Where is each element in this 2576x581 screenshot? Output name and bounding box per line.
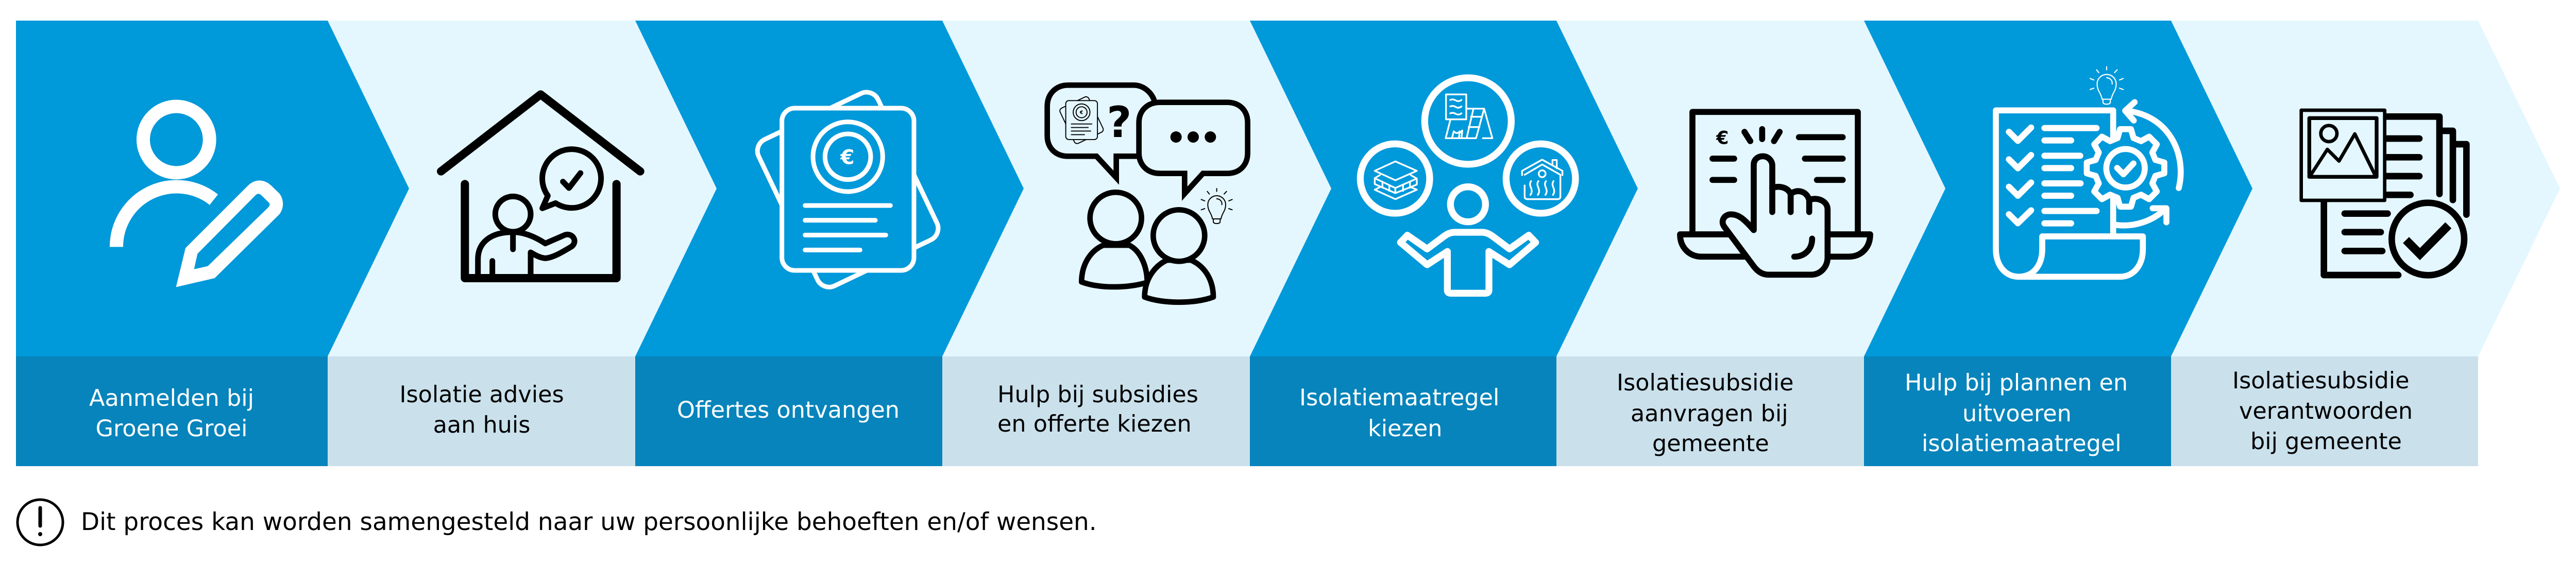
label: step 7: uitvoeren bbox=[1962, 401, 2072, 427]
note text: Dit proces kan worden samengesteld naar uw persoonlijke behoeften en/of wensen. bbox=[81, 508, 1097, 536]
label: step 1: Groene Groei bbox=[96, 416, 247, 442]
label: step 5: Isolatiemaatregel bbox=[1299, 385, 1499, 411]
icon: adviser in house bbox=[441, 94, 640, 278]
label: step 7: isolatiemaatregel bbox=[1922, 431, 2122, 457]
label: step 8 bbox=[2171, 356, 2478, 466]
label: step 7: Hulp bij plannen en bbox=[1905, 370, 2128, 396]
icon: two people talking: € bbox=[1079, 110, 1083, 115]
chevron: step 5 bbox=[1250, 21, 1639, 356]
chevron: step 2 bbox=[328, 21, 718, 356]
chevron: step 8 bbox=[2171, 21, 2560, 356]
chevron: step 1 bbox=[16, 21, 410, 356]
panel: step 3 offertes bbox=[635, 21, 1025, 466]
icon: two people talking: ? bbox=[1107, 97, 1132, 147]
label: step 7 bbox=[1864, 356, 2171, 466]
label: step 8: bij gemeente bbox=[2250, 429, 2402, 455]
icon: hand clicking on laptop: € bbox=[1716, 128, 1729, 148]
panel: step 7 plannen bbox=[1864, 21, 2253, 466]
icon: quotation documents bbox=[753, 88, 942, 292]
icon: quotation documents: € bbox=[840, 145, 855, 169]
label: step 3: Offertes ontvangen bbox=[677, 397, 900, 423]
label: step 1: Aanmelden bij bbox=[89, 385, 254, 412]
icon: person with pencil bbox=[116, 107, 283, 287]
label: step 2: Isolatie advies bbox=[399, 382, 564, 408]
label: step 6: aanvragen bij bbox=[1631, 401, 1788, 427]
panel: step 6 aanvragen bbox=[1556, 21, 1946, 466]
chevron: step 3 bbox=[635, 21, 1025, 356]
label: step 6 bbox=[1556, 356, 1864, 466]
panel: step 2 advies bbox=[328, 21, 718, 466]
icon: exclamation mark in circle bbox=[18, 500, 63, 545]
label: step 5: kiezen bbox=[1368, 416, 1442, 442]
label: step 4 bbox=[942, 356, 1250, 466]
label: step 6: gemeente bbox=[1652, 431, 1769, 457]
label: step 8: verantwoorden bbox=[2239, 398, 2413, 424]
label: step 1 bbox=[16, 356, 328, 466]
label: step 2 bbox=[328, 356, 635, 466]
icon: two people talking bbox=[1047, 85, 1248, 302]
icon: person choosing between insulation options bbox=[1360, 78, 1575, 293]
label: step 5 bbox=[1250, 356, 1556, 466]
panel: step 1 aanmelden bbox=[16, 21, 410, 466]
label: step 2: aan huis bbox=[433, 412, 530, 438]
icon: checklist with gear and lightbulb bbox=[1996, 67, 2181, 277]
panel: step 4 hulp bbox=[942, 21, 1332, 466]
chevron: step 6 bbox=[1556, 21, 1946, 356]
panel: step 8 verantwoorden bbox=[2171, 21, 2560, 466]
panel: step 5 maatregel bbox=[1250, 21, 1639, 466]
label: step 6: Isolatiesubsidie bbox=[1617, 370, 1794, 396]
chevron: step 7 bbox=[1864, 21, 2253, 356]
label: step 3 bbox=[635, 356, 942, 466]
chevron: step 4 bbox=[942, 21, 1332, 356]
label: step 4: en offerte kiezen bbox=[997, 411, 1192, 437]
label: step 8: Isolatiesubsidie bbox=[2232, 368, 2410, 394]
label: step 4: Hulp bij subsidies bbox=[997, 382, 1198, 408]
icon: documents with check mark bbox=[2301, 110, 2466, 275]
icon: hand clicking on laptop bbox=[1680, 112, 1870, 275]
